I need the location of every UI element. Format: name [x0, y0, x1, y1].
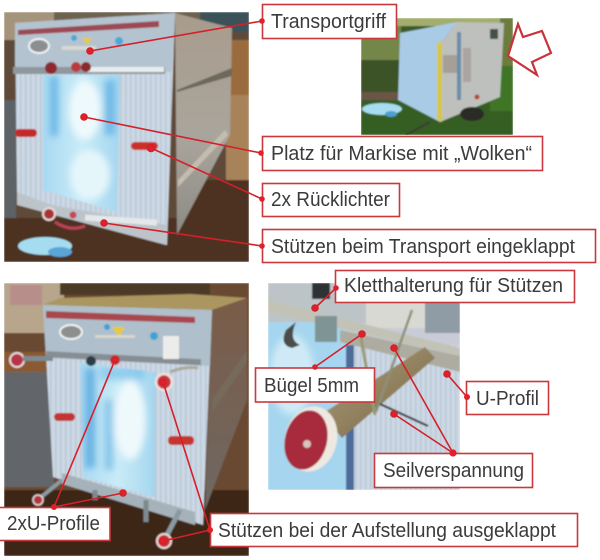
label: 2x Rücklichter: 2x Rücklichter: [271, 189, 390, 211]
callout leaders: transport photo: [81, 21, 262, 246]
label: Transportgriff: [262, 4, 396, 38]
label: U-Profil: [466, 382, 548, 414]
label: Platz für Markise: Platz für Markise mit „Wolken“: [271, 143, 532, 165]
label: Stützen bei der Aufstellung ausgeklappt: [210, 514, 578, 546]
photo: trailer rear with supports deployed: [4, 283, 249, 556]
photo: detail of support tube and U-profile: [268, 283, 460, 490]
callout leaders: detail photo: [312, 288, 467, 453]
label: Bügel 5mm: [256, 368, 374, 402]
label: Seilverspannung: Seilverspannung: [383, 460, 524, 482]
label: U-Profil: U-Profil: [476, 388, 539, 410]
label: Stützen beim Transport eingeklappt: [262, 230, 596, 262]
anchor dots on label edges: [51, 18, 470, 533]
label: Kletthalterung für Stützen: Kletthalterung für Stützen: [344, 275, 563, 297]
label: 2xU-Profile: [0, 508, 110, 540]
label: Platz für Markise: [262, 136, 542, 170]
label: Transportgriff: Transportgriff: [271, 11, 386, 33]
label: Bügel 5mm: Bügel 5mm: [264, 375, 359, 397]
photo: trailer overview on lawn: [361, 18, 513, 135]
label: Kletthalterung für Stützen: [336, 270, 574, 302]
label: Stützen bei der Aufstellung ausgeklappt: Stützen bei der Aufstellung ausgeklappt: [218, 520, 556, 542]
arrow: outlined red pointer to the trailer: [508, 24, 551, 75]
label: Stützen beim Transport eingeklappt: Stützen beim Transport eingeklappt: [271, 236, 575, 258]
callout leaders: deployed photo: [54, 357, 210, 544]
photo: trailer rear in transport state: [4, 12, 249, 262]
label: 2xU-Profile: 2xU-Profile: [7, 513, 100, 535]
label: Seilverspannung: [374, 454, 532, 488]
label: 2x Rücklichter: [262, 184, 400, 216]
